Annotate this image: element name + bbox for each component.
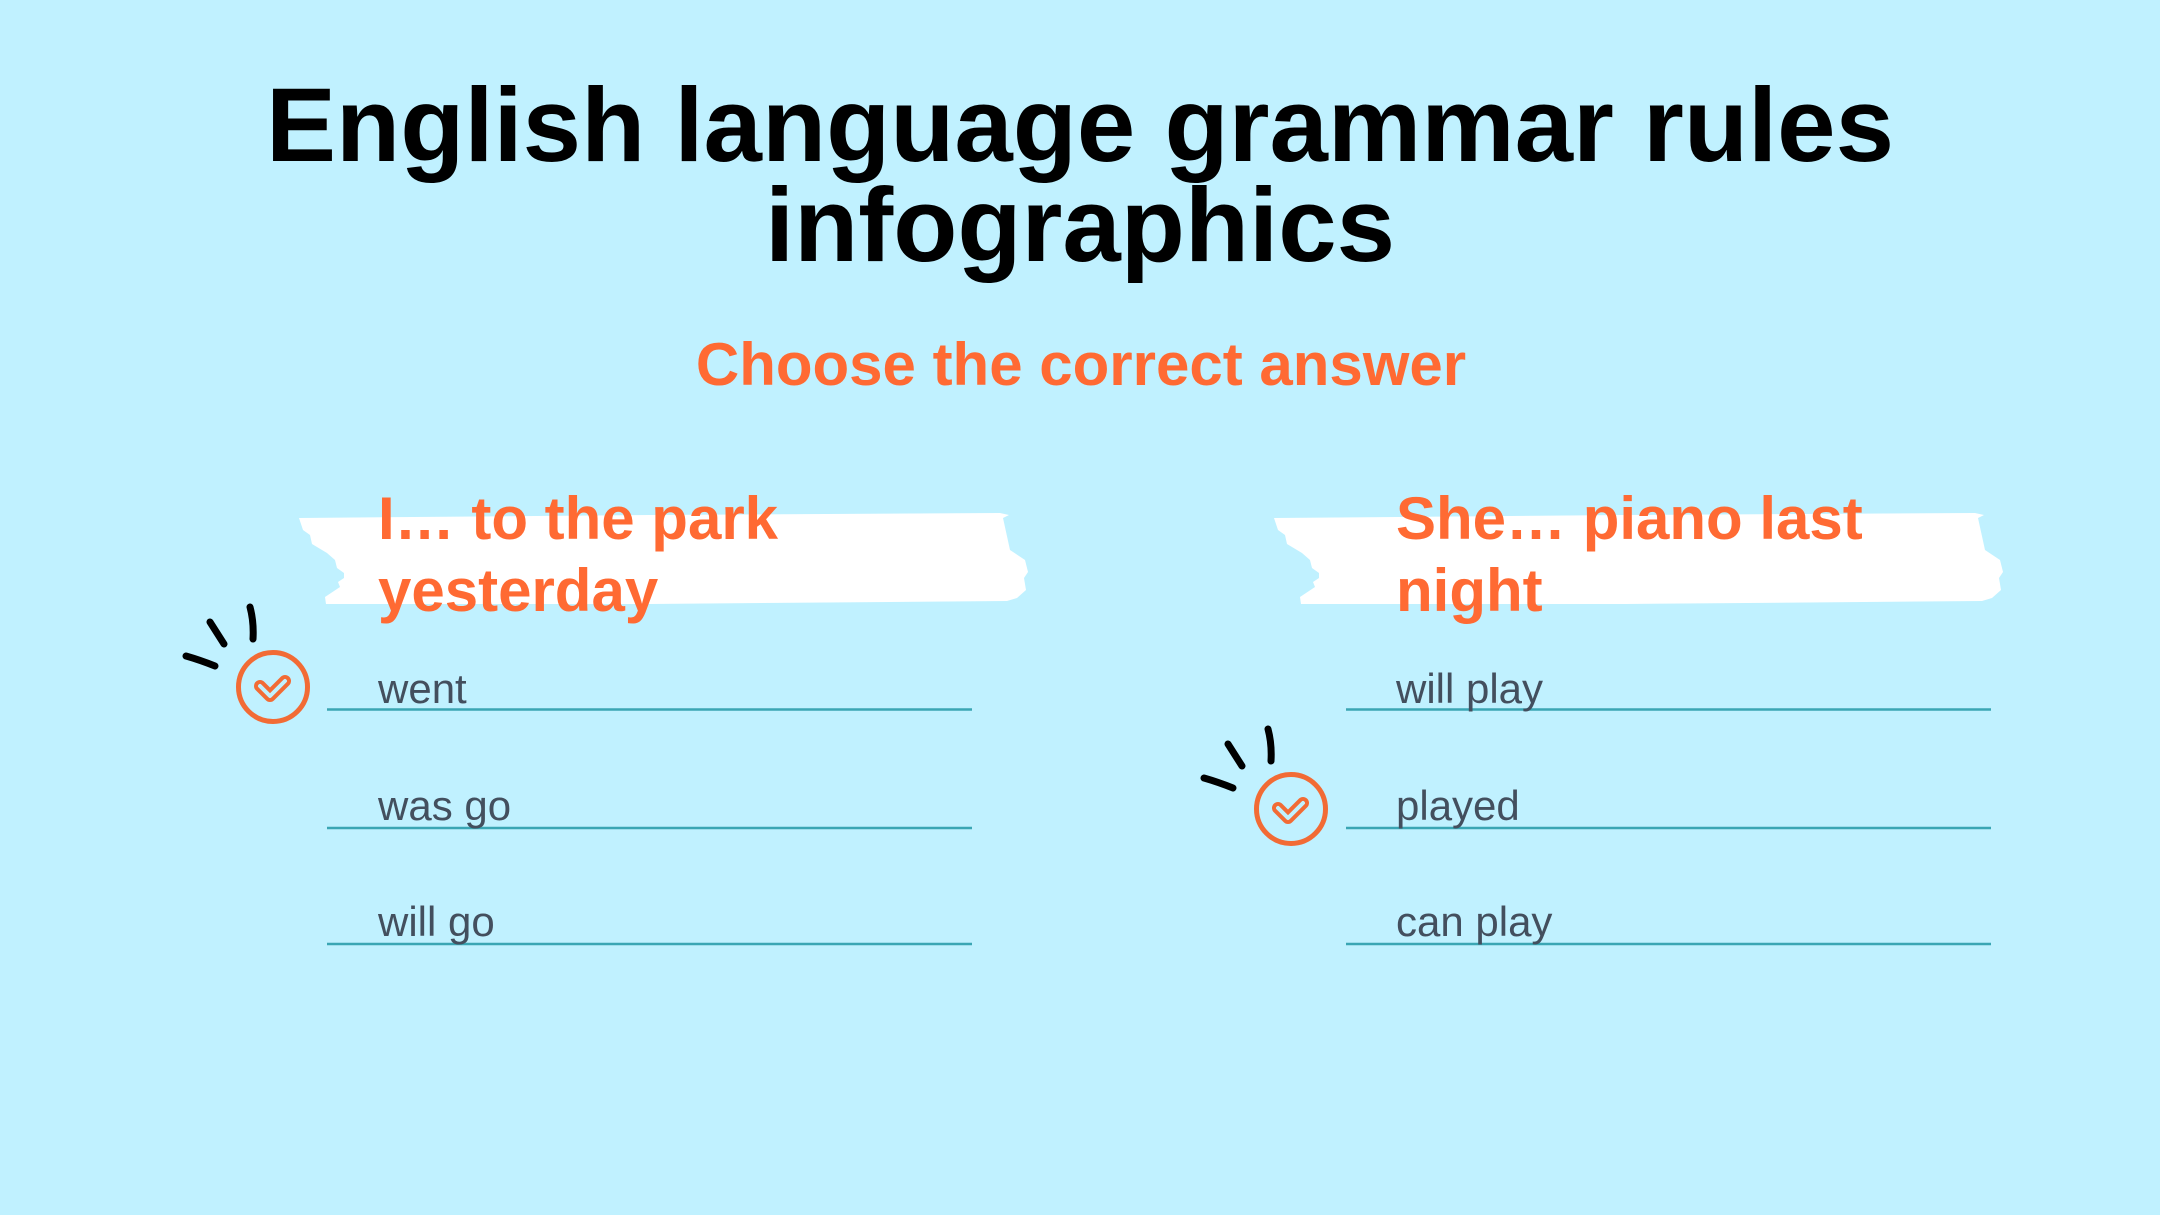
option: can play: can play xyxy=(1396,898,1552,945)
title: infographics xyxy=(765,167,1395,284)
option: went: went xyxy=(378,665,467,712)
option: was go: was go xyxy=(378,782,511,829)
white tape left xyxy=(299,513,1028,604)
icon: check left xyxy=(186,607,308,722)
question right: She… piano last xyxy=(1396,485,1863,552)
title xyxy=(266,67,1894,284)
white tape right xyxy=(1274,513,2003,604)
answer lines left xyxy=(327,710,972,944)
option: played: played xyxy=(1396,782,1520,829)
option: will play: will play xyxy=(1396,665,1543,712)
answer lines right xyxy=(1346,710,1991,944)
question right xyxy=(1396,485,1863,624)
question left: yesterday xyxy=(378,557,658,624)
icon: check right xyxy=(1204,729,1326,844)
option: will go: will go xyxy=(378,898,495,945)
subtitle: Choose the correct answer xyxy=(696,331,1466,398)
question right: night xyxy=(1396,557,1543,624)
question left xyxy=(378,485,778,624)
question left: I… to the park xyxy=(378,485,778,552)
title: English language grammar rules xyxy=(266,67,1894,184)
